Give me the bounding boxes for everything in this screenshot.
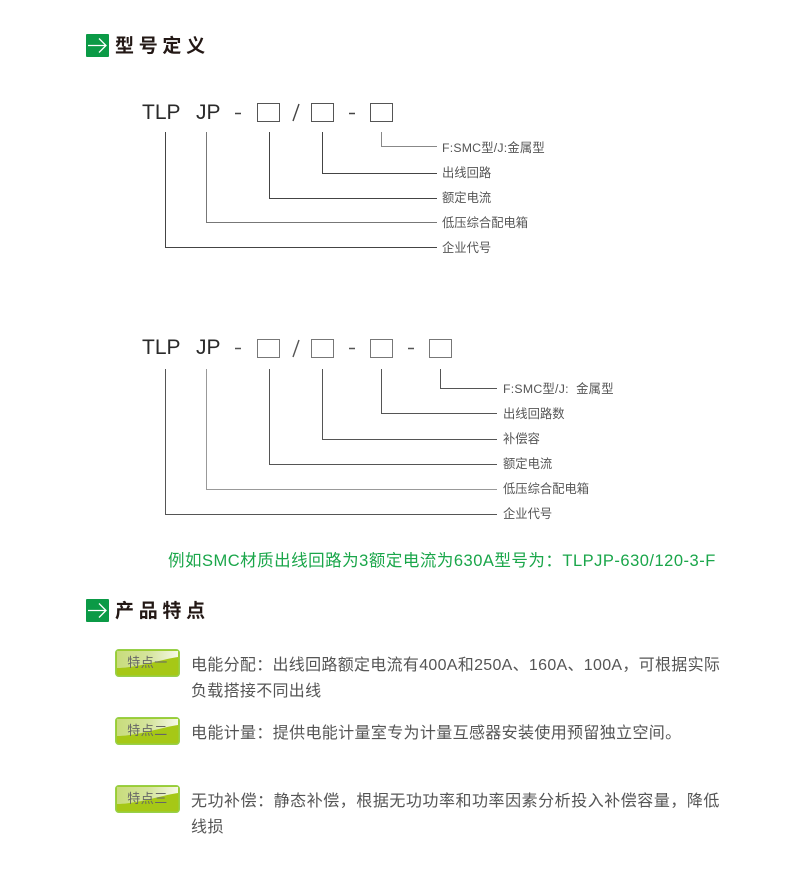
badge: 特点二 (127, 723, 168, 738)
label: 补偿容 (503, 432, 540, 446)
diagram: model code 2 (142, 336, 614, 521)
feature text: 线损 (191, 819, 224, 836)
code text JP: JP (196, 101, 221, 124)
example note in green: 例如SMC材质出线回路为3额定电流为630A型号为：TLPJP-630/120-3-F (168, 552, 716, 570)
code text: TLP (142, 101, 181, 124)
badge: 特点三 (127, 791, 168, 806)
feature text (191, 656, 720, 700)
label: F:SMC型/J: 金属型 (503, 382, 614, 396)
feature text: 电能计量：提供电能计量室专为计量互感器安装使用预留独立空间。 (191, 725, 682, 742)
feature 1 (115, 649, 720, 700)
badge (115, 717, 180, 745)
heading text: 产品特点 (115, 596, 210, 623)
feature text (191, 792, 720, 836)
feature 2 (115, 717, 682, 745)
label: 低压综合配电箱 (442, 216, 528, 230)
connector lines (165, 339, 497, 515)
code text JP: JP (196, 336, 221, 359)
heading text: 型号定义 (115, 31, 210, 58)
label: 低压综合配电箱 (503, 482, 589, 496)
label: F:SMC型/J:金属型 (442, 141, 545, 155)
label: 企业代号 (503, 507, 552, 521)
label: 额定电流 (503, 457, 552, 471)
label: 额定电流 (442, 191, 491, 205)
diagram: model code 1 (142, 101, 545, 255)
label: 出线回路 (442, 166, 491, 180)
label: 企业代号 (442, 241, 491, 255)
badge (115, 649, 180, 677)
heading: 型号定义 (86, 31, 210, 58)
label: 出线回路数 (503, 407, 564, 421)
feature text: 电能分配：出线回路额定电流有400A和250A、160A、100A，可根据实际 (191, 657, 720, 674)
badge: 特点一 (127, 655, 168, 670)
feature text: 负载搭接不同出线 (191, 683, 321, 700)
heading: 产品特点 (86, 596, 210, 623)
code text: TLP (142, 336, 181, 359)
connector lines (165, 103, 437, 248)
icon: green arrow (86, 34, 109, 57)
icon: green arrow (86, 599, 109, 622)
feature 3 (115, 785, 720, 836)
badge (115, 785, 180, 813)
feature text: 无功补偿：静态补偿，根据无功功率和功率因素分析投入补偿容量，降低 (191, 793, 720, 810)
